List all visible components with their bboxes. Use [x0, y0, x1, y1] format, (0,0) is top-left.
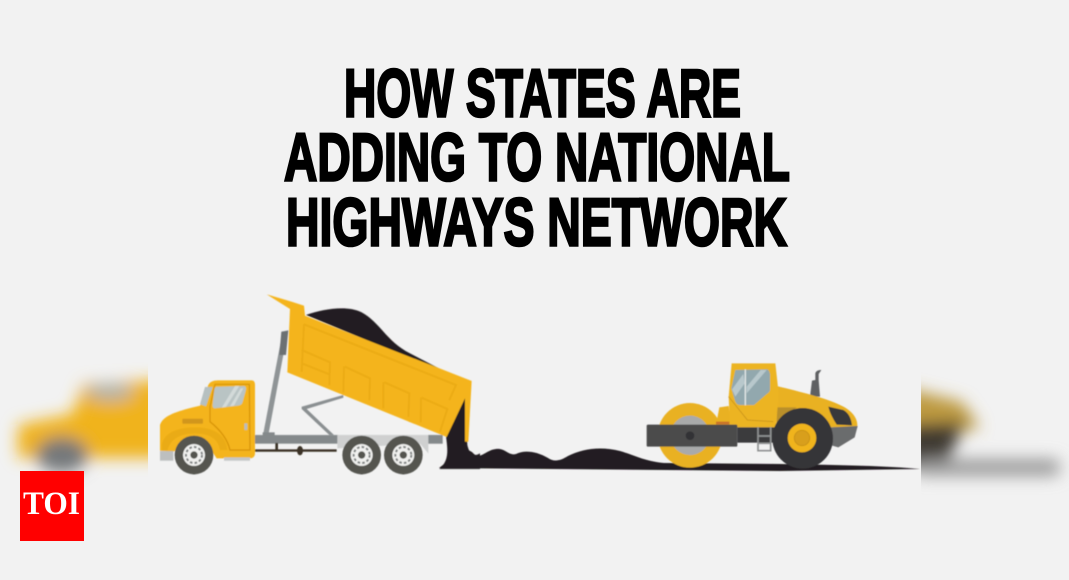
main frame: [647, 425, 737, 447]
title: HIGHWAYS NETWORK: [286, 184, 787, 260]
blurred roller backdrop, right: [905, 388, 1060, 476]
dump truck: [160, 294, 480, 474]
ladder: [758, 427, 771, 451]
rear body: [777, 386, 857, 427]
bumper and step: [160, 451, 173, 461]
road roller: [647, 363, 858, 469]
dump bed: [267, 294, 472, 437]
rear wheel: [772, 408, 833, 469]
title: HOW STATES ARE: [344, 56, 741, 132]
grille and handle: [182, 419, 203, 424]
wheels: [175, 436, 213, 474]
asphalt road: [439, 449, 920, 471]
truck cab: [160, 380, 255, 458]
TOI logo: [20, 471, 84, 541]
step box: [716, 406, 732, 425]
blurred truck backdrop, left: [18, 380, 165, 473]
windows: [213, 386, 246, 408]
central panel: [148, 355, 921, 490]
asphalt load: [306, 308, 455, 377]
hydraulic ram: [263, 332, 288, 433]
chassis: [255, 435, 338, 444]
front drum: [658, 403, 722, 468]
TOI logo: TOI: [23, 486, 80, 522]
falling asphalt: [439, 398, 480, 469]
exhaust: [810, 370, 821, 397]
rear guard: [830, 426, 858, 447]
title: ADDING TO NATIONAL: [284, 120, 790, 196]
scissor arm: [302, 395, 343, 435]
cab: [729, 363, 779, 427]
illustration: dump truck and road roller: [160, 294, 920, 474]
cab door: [210, 384, 250, 450]
title: [284, 56, 790, 260]
